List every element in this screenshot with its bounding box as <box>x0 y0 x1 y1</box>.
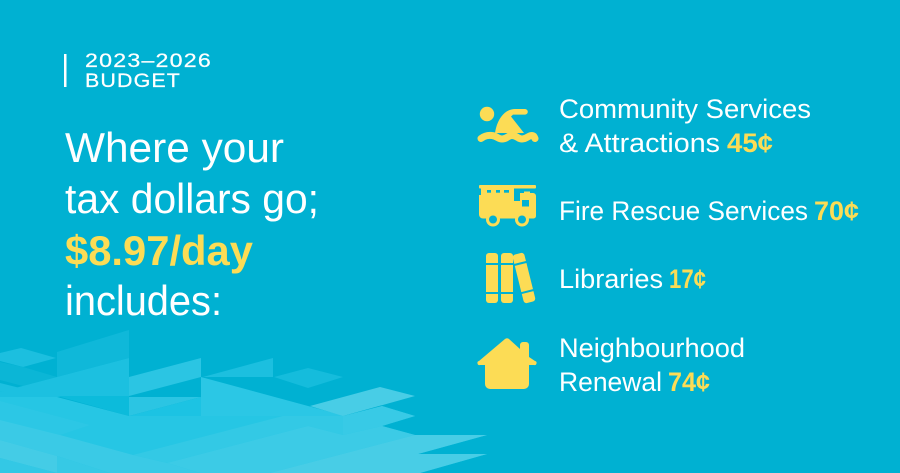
label: fire rescue: Fire Rescue Services <box>559 196 808 226</box>
item: libraries <box>486 252 706 304</box>
label: community services: Community Services <box>559 94 811 124</box>
budget label: BUDGET <box>85 71 181 92</box>
label: community services <box>559 94 811 158</box>
geometric background pattern <box>0 330 487 473</box>
icon: house <box>477 338 537 389</box>
main heading: Where your <box>65 124 284 171</box>
main heading <box>65 124 319 324</box>
label: neighbourhood renewal <box>559 333 745 397</box>
item: community services <box>480 94 811 158</box>
label: fire rescue: 70¢ <box>814 196 859 226</box>
icon: swimmer <box>480 107 535 139</box>
label: community services: & Attractions <box>559 128 720 158</box>
label: neighbourhood renewal: Renewal <box>559 367 662 397</box>
item: neighbourhood renewal <box>477 333 745 397</box>
main heading: $8.97/day <box>65 227 254 274</box>
budget label: 2023–2026 <box>85 51 212 72</box>
budget label <box>64 51 212 92</box>
item: fire rescue <box>479 185 859 226</box>
label: libraries: 17¢ <box>669 264 706 294</box>
main heading: includes: <box>65 277 222 324</box>
label: neighbourhood renewal: Neighbourhood <box>559 333 745 363</box>
label: libraries: Libraries <box>559 264 663 294</box>
label: neighbourhood renewal: 74¢ <box>668 367 710 397</box>
main heading: tax dollars go; <box>65 175 319 222</box>
icon: books <box>486 252 536 304</box>
label: community services: 45¢ <box>727 128 773 158</box>
icon: fire truck <box>479 185 536 226</box>
